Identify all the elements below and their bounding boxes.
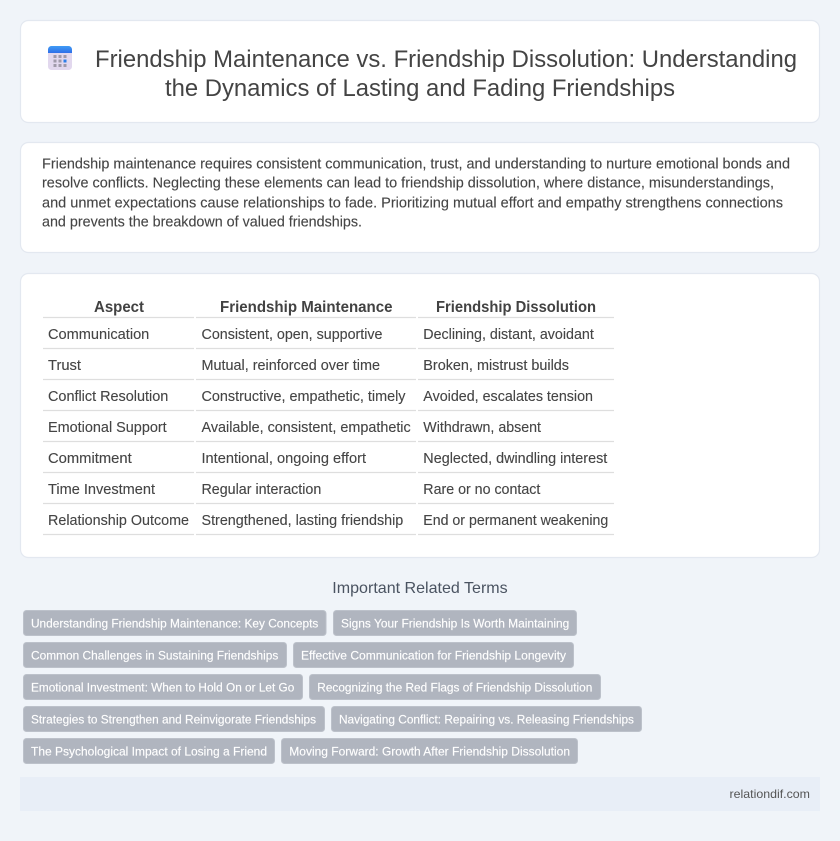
row: commitment: Neglected, dwindling interest [423, 451, 607, 467]
row: commitment: Commitment [48, 451, 132, 467]
row: communication: Consistent, open, supportive [202, 327, 382, 343]
row: relationship outcome [48, 513, 608, 529]
table header row: Aspect [94, 299, 145, 316]
row: commitment [48, 451, 607, 467]
tag: Emotional Investment: When to Hold On or Let Go [31, 680, 294, 694]
row: conflict resolution: Avoided, escalates tension [423, 389, 593, 405]
header panel [20, 20, 820, 122]
panel: introduction paragraph: resolve conflicts. Neglecting these elements can lead to friendship dissolution, where distance, misunderstandings, [42, 176, 774, 192]
row: emotional support [48, 420, 541, 436]
row: communication [48, 327, 594, 343]
row: time investment: Regular interaction [202, 482, 321, 498]
row: emotional support: Emotional Support [48, 420, 167, 436]
row: trust: Broken, mistrust builds [423, 358, 569, 374]
row: communication: Declining, distant, avoidant [423, 327, 594, 343]
row: trust: Mutual, reinforced over time [202, 358, 380, 374]
tag: Signs Your Friendship Is Worth Maintaining [341, 616, 569, 630]
row: relationship outcome: End or permanent weakening [423, 513, 608, 529]
footer [20, 777, 820, 811]
tag: Common Challenges in Sustaining Friendships [31, 648, 278, 662]
row: commitment: Intentional, ongoing effort [202, 451, 366, 467]
tag: Effective Communication for Friendship Longevity [301, 648, 567, 662]
tag: Navigating Conflict: Repairing vs. Releasing Friendships [339, 712, 634, 726]
icon: calendar [48, 46, 72, 70]
panel: introduction paragraph: and unmet expectations cause relationships to fade. Prioritizing mutual effort and empathy strengthens connections [42, 195, 783, 211]
tag: Understanding Friendship Maintenance: Key Concepts [31, 616, 318, 630]
tag [332, 706, 642, 732]
tag: Moving Forward: Growth After Friendship Dissolution [289, 744, 570, 758]
row: conflict resolution: Constructive, empathetic, timely [202, 389, 406, 405]
tag [24, 642, 286, 668]
row: time investment: Rare or no contact [423, 482, 540, 498]
title: the Dynamics of Lasting and Fading Friendships [165, 75, 675, 102]
title [95, 46, 797, 102]
table header row: Friendship Maintenance [220, 299, 393, 316]
panel: introduction paragraph: Friendship maintenance requires consistent communication, trust, and understanding to nurture emotional bonds and [42, 156, 790, 172]
related term tags [24, 610, 642, 764]
tag [24, 738, 274, 764]
row: conflict resolution: Conflict Resolution [48, 389, 168, 405]
heading: important related terms: Important Related Terms [332, 580, 508, 597]
row: time investment: Time Investment [48, 482, 155, 498]
row: trust: Trust [48, 358, 81, 374]
panel: comparison table [20, 274, 820, 558]
tag [334, 610, 576, 636]
panel: introduction paragraph [20, 142, 820, 252]
tag [310, 674, 600, 700]
row: emotional support: Available, consistent, empathetic [202, 420, 411, 436]
row: time investment [48, 482, 540, 498]
panel: introduction paragraph: and prevents the breakdown of valued friendships. [42, 215, 362, 231]
row: trust [48, 358, 569, 374]
table header row [94, 299, 596, 316]
row: relationship outcome: Relationship Outcome [48, 513, 189, 529]
tag: The Psychological Impact of Losing a Friend [31, 744, 267, 758]
title: Friendship Maintenance vs. Friendship Dissolution: Understanding [95, 46, 797, 73]
tag [24, 610, 326, 636]
row: communication: Communication [48, 327, 149, 343]
row: relationship outcome: Strengthened, lasting friendship [202, 513, 403, 529]
table header row: Friendship Dissolution [436, 299, 596, 316]
tag: Strategies to Strengthen and Reinvigorate Friendships [31, 712, 316, 726]
tag [24, 706, 324, 732]
row: emotional support: Withdrawn, absent [423, 420, 541, 436]
tag [24, 674, 302, 700]
tag [282, 738, 578, 764]
footer: relationdif.com [730, 787, 810, 801]
row: conflict resolution [48, 389, 593, 405]
tag [294, 642, 574, 668]
tag: Recognizing the Red Flags of Friendship Dissolution [317, 680, 592, 694]
